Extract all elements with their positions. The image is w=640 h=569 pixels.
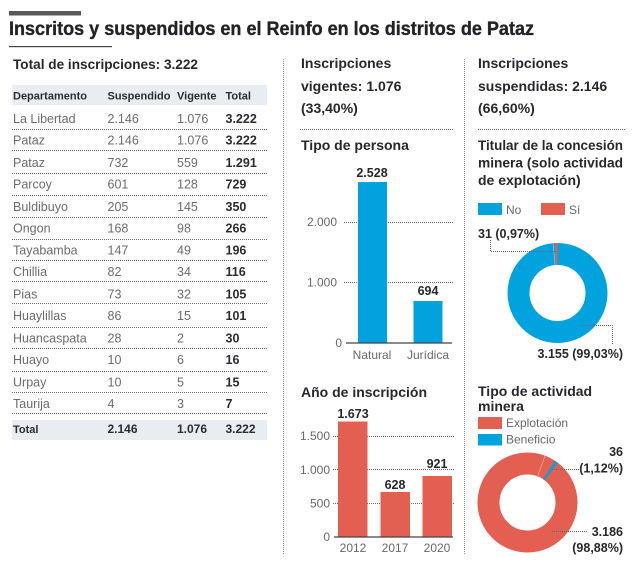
donut chart: tipo de actividad minera: (1,12%) (579, 462, 623, 476)
bar chart: tipo de persona: 694 (418, 284, 438, 298)
donut chart: titular de la concesión: 3.155 (99,03%) (538, 347, 623, 361)
legend: explotación / beneficio: Explotación (506, 416, 568, 430)
heading: inscripciones vigentes (300, 55, 453, 130)
table: inscripciones por distrito: 3.222 (226, 112, 257, 126)
donut chart: titular de la concesión: 31 (0,97%) (478, 227, 539, 241)
bar chart: tipo de persona: Jurídica (407, 348, 449, 362)
table: inscripciones por distrito: 2 (177, 332, 184, 346)
table: inscripciones por distrito: Parcoy (13, 178, 53, 192)
bar chart: año de inscripción (300, 407, 455, 555)
heading: titular de la concesión minera: Titular de la concesión (478, 137, 623, 153)
bar chart: tipo de persona: 1.000 (307, 276, 337, 290)
table: inscripciones por distrito: 3.222 (226, 422, 256, 436)
table: inscripciones por distrito: 2.146 (108, 422, 138, 436)
table: inscripciones por distrito: 350 (226, 200, 246, 214)
heading: inscripciones vigentes: (33,40%) (301, 100, 358, 116)
table: inscripciones por distrito: 3.222 (226, 134, 257, 148)
table: inscripciones por distrito: Total (226, 90, 251, 102)
bar chart: año de inscripción: 2017 (382, 541, 409, 555)
table: inscripciones por distrito: 15 (226, 376, 239, 390)
table: inscripciones por distrito: 32 (177, 288, 191, 302)
table: inscripciones por distrito: 16 (226, 353, 239, 367)
heading: inscripciones suspendidas: Inscripciones (478, 55, 568, 71)
table: inscripciones por distrito: 101 (226, 309, 246, 323)
title block (9, 11, 534, 47)
table: inscripciones por distrito: 3 (177, 397, 184, 411)
table: inscripciones por distrito: 82 (108, 265, 121, 279)
donut chart: tipo de actividad minera: 36 (609, 445, 623, 459)
table: inscripciones por distrito: 266 (226, 222, 246, 236)
bar chart: tipo de persona (307, 166, 453, 362)
table: inscripciones por distrito: 10 (108, 376, 121, 390)
table: inscripciones por distrito: Taurija (13, 397, 50, 411)
table: inscripciones por distrito: 128 (177, 178, 198, 192)
table: inscripciones por distrito: La Libertad (13, 112, 76, 126)
table: inscripciones por distrito: 601 (108, 178, 128, 192)
table: inscripciones por distrito: Pataz (13, 134, 45, 148)
table: inscripciones por distrito: 5 (177, 376, 184, 390)
table: inscripciones por distrito: 205 (108, 200, 128, 214)
table: inscripciones por distrito: 10 (108, 353, 121, 367)
table: inscripciones por distrito: Pias (13, 288, 37, 302)
table: inscripciones por distrito: 6 (177, 353, 184, 367)
heading: inscripciones suspendidas: (66,60%) (478, 100, 535, 116)
table: inscripciones por distrito: 729 (226, 178, 246, 192)
table: inscripciones por distrito: 98 (177, 222, 191, 236)
table: inscripciones por distrito: Buldibuyo (13, 200, 68, 214)
table: inscripciones por distrito: Huaylillas (13, 309, 66, 323)
bar chart: año de inscripción: 1.500 (300, 429, 330, 443)
table: inscripciones por distrito: Ongon (13, 222, 51, 236)
bar chart: año de inscripción: 921 (427, 457, 447, 471)
heading: tipo de persona: Tipo de persona (301, 137, 409, 153)
table: inscripciones por distrito: 86 (108, 309, 121, 323)
table: inscripciones por distrito: 105 (226, 288, 246, 302)
bar chart: tipo de persona: Natural (353, 348, 391, 362)
table: inscripciones por distrito: Huancaspata (13, 332, 87, 346)
table: inscripciones por distrito: 34 (177, 265, 191, 279)
table: inscripciones por distrito: 2.146 (108, 112, 139, 126)
table: inscripciones por distrito: Departamento (13, 90, 87, 102)
heading: inscripciones vigentes: Inscripciones (301, 55, 391, 71)
bar chart: tipo de persona: 2.528 (356, 166, 388, 180)
table: inscripciones por distrito: Chillia (13, 265, 47, 279)
heading: tipo de actividad minera: Tipo de actividad (478, 383, 592, 399)
heading: titular de la concesión minera: de explotación) (478, 172, 581, 188)
table: inscripciones por distrito: Vigente (177, 90, 217, 102)
table: inscripciones por distrito: 1.291 (226, 156, 257, 170)
donut chart: titular de la concesión (478, 227, 623, 361)
table: inscripciones por distrito: Suspendido (108, 90, 171, 102)
bar chart: año de inscripción: 628 (385, 478, 405, 492)
table: inscripciones por distrito: Huayo (13, 353, 49, 367)
table: inscripciones por distrito: 30 (226, 332, 239, 346)
bar chart: año de inscripción: 500 (310, 496, 330, 510)
heading: tipo de actividad minera (478, 383, 592, 414)
table: inscripciones por distrito: 4 (108, 397, 114, 411)
table: inscripciones por distrito: 559 (177, 156, 198, 170)
table heading: total de inscripciones: Total de inscripciones: 3.222 (13, 56, 198, 72)
donut chart: tipo de actividad minera (473, 445, 623, 557)
table: inscripciones por distrito: Tayabamba (13, 244, 78, 258)
table: inscripciones por distrito: 1.076 (177, 112, 208, 126)
table: inscripciones por distrito: Total (13, 424, 38, 436)
heading: titular de la concesión minera: minera (solo actividad (478, 154, 623, 170)
heading: inscripciones suspendidas: suspendidas: 2.146 (478, 78, 607, 94)
legend: explotación / beneficio: Beneficio (506, 432, 556, 446)
table: inscripciones por distrito: Urpay (13, 376, 47, 390)
table: inscripciones por distrito: 1.076 (177, 134, 208, 148)
donut chart: tipo de actividad minera: (98,88%) (572, 541, 623, 555)
table: inscripciones por distrito: 1.076 (177, 422, 207, 436)
legend: explotación / beneficio (478, 416, 568, 446)
bar chart: tipo de persona: 0 (335, 336, 342, 350)
table: inscripciones por distrito: 145 (177, 200, 198, 214)
bar chart: año de inscripción: 0 (323, 530, 330, 544)
bar chart: tipo de persona: 2.000 (307, 215, 337, 229)
bar chart: año de inscripción: 2020 (424, 541, 451, 555)
heading: inscripciones vigentes: vigentes: 1.076 (301, 78, 402, 94)
legend: no / sí: Sí (569, 203, 581, 217)
bar chart: año de inscripción: 2012 (340, 541, 367, 555)
table: inscripciones por distrito: 28 (108, 332, 121, 346)
table: inscripciones por distrito: 49 (177, 244, 191, 258)
table: inscripciones por distrito: 15 (177, 309, 191, 323)
table: inscripciones por distrito: 732 (108, 156, 128, 170)
table: inscripciones por distrito: 7 (226, 397, 232, 411)
title block: Inscritos y suspendidos en el Reinfo en los distritos de Pataz (9, 19, 534, 40)
bar chart: año de inscripción: 1.673 (337, 407, 369, 421)
table: inscripciones por distrito: 116 (226, 265, 246, 279)
table: inscripciones por distrito: 2.146 (108, 134, 139, 148)
legend: no / sí (478, 203, 581, 217)
table: inscripciones por distrito (12, 85, 267, 440)
donut chart: tipo de actividad minera: 3.186 (592, 525, 623, 539)
bar chart: año de inscripción: 1.000 (300, 463, 330, 477)
table: inscripciones por distrito: 168 (108, 222, 128, 236)
heading: titular de la concesión minera (478, 137, 623, 188)
table: inscripciones por distrito: 196 (226, 244, 246, 258)
heading: año de inscripción: Año de inscripción (301, 384, 427, 400)
table: inscripciones por distrito: 73 (108, 288, 121, 302)
legend: no / sí: No (506, 203, 522, 217)
table: inscripciones por distrito: Pataz (13, 156, 45, 170)
table: inscripciones por distrito: 147 (108, 244, 128, 258)
heading: tipo de actividad minera: minera (478, 398, 524, 414)
heading: inscripciones suspendidas (478, 55, 625, 130)
